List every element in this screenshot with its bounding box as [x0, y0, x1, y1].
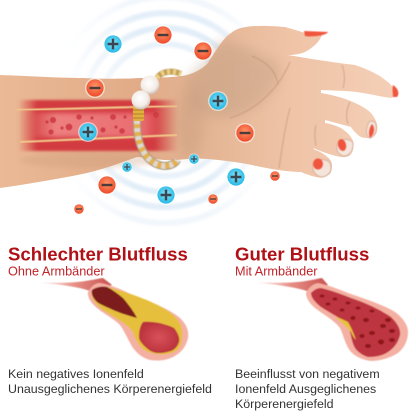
fingertip highlights	[313, 121, 376, 177]
blood cells	[46, 113, 158, 134]
artery illustration: clogged	[33, 278, 188, 361]
subheading: bad: Ohne Armbänder	[8, 264, 105, 278]
ions: negative	[74, 25, 280, 214]
heading: good: Guter Blutfluss	[235, 244, 369, 264]
bracelet	[132, 72, 181, 166]
ions: positive	[78, 34, 246, 205]
palm creases	[230, 56, 350, 168]
pearls	[132, 76, 160, 110]
arm and hand	[0, 26, 396, 188]
panel: bad blood flow	[8, 244, 212, 396]
subheading: good: Mit Armbänder	[235, 264, 318, 278]
panel: bad blood flow: Unausgeglichenes Körperenergiefeld	[8, 382, 212, 396]
artery illustration: clear	[250, 278, 408, 361]
heading: bad: Schlechter Blutfluss	[8, 244, 188, 264]
description: good: Beeinflusst von negativem	[235, 367, 380, 381]
blood vessel in the arm	[17, 100, 178, 151]
panel: good blood flow	[235, 244, 408, 411]
description: bad: Kein negatives Ionenfeld	[8, 367, 144, 381]
fingernails	[304, 31, 398, 170]
panel: good blood flow: Ionenfeld Ausgeglichenes	[235, 382, 376, 396]
energy wave rings	[52, 0, 278, 223]
vessel walls	[17, 106, 177, 110]
hand shading	[20, 40, 280, 168]
panel: good blood flow: Körperenergiefeld	[235, 397, 334, 411]
